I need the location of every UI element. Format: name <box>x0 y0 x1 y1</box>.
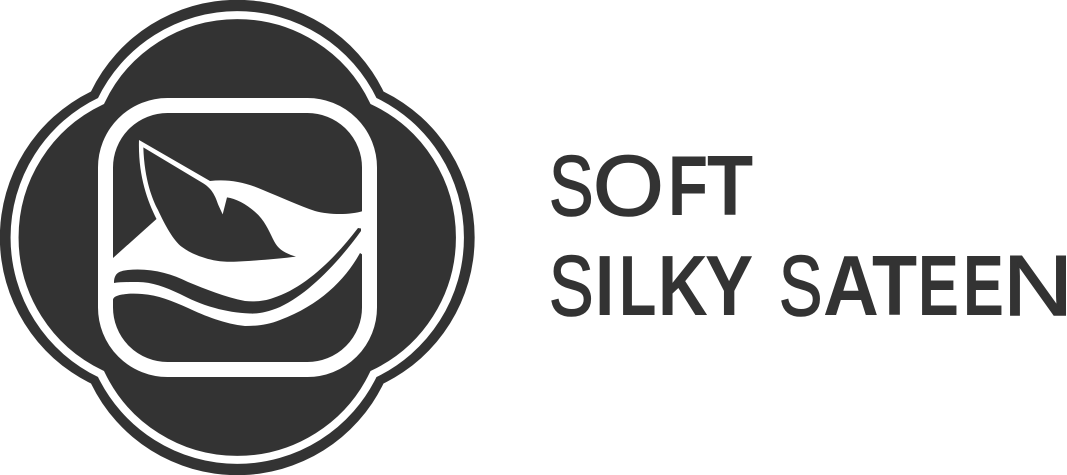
heading line: SILKY SATEEN: T <box>872 239 917 334</box>
heading line: SOFT: T <box>706 139 753 234</box>
heading line: SILKY SATEEN: Y <box>705 239 753 334</box>
heading line: SOFT: S <box>549 139 594 234</box>
heading line: SOFT: O <box>593 139 663 234</box>
heading line: SOFT <box>549 139 753 234</box>
quatrefoil inner outline <box>15 15 460 460</box>
heading line: SILKY SATEEN: K <box>658 239 708 334</box>
heading line: SILKY SATEEN: E <box>918 239 959 334</box>
heading line: SILKY SATEEN: A <box>823 239 879 334</box>
logo emblem <box>0 0 475 475</box>
icon: leaf and silk waves <box>113 140 363 326</box>
heading line: SOFT: F <box>668 139 708 234</box>
silk fabric white shape <box>113 140 363 326</box>
quatrefoil badge <box>0 0 475 475</box>
heading line: SILKY SATEEN: S <box>549 239 594 334</box>
leaf <box>143 147 296 262</box>
heading line: SILKY SATEEN <box>549 239 1067 334</box>
heading line: SILKY SATEEN: S <box>779 239 822 334</box>
heading line: SILKY SATEEN: I <box>595 239 615 334</box>
heading line: SILKY SATEEN: E <box>963 239 1004 334</box>
rounded square frame <box>106 106 370 370</box>
silk wave stripe <box>114 228 361 314</box>
heading line: SILKY SATEEN: L <box>619 239 656 334</box>
